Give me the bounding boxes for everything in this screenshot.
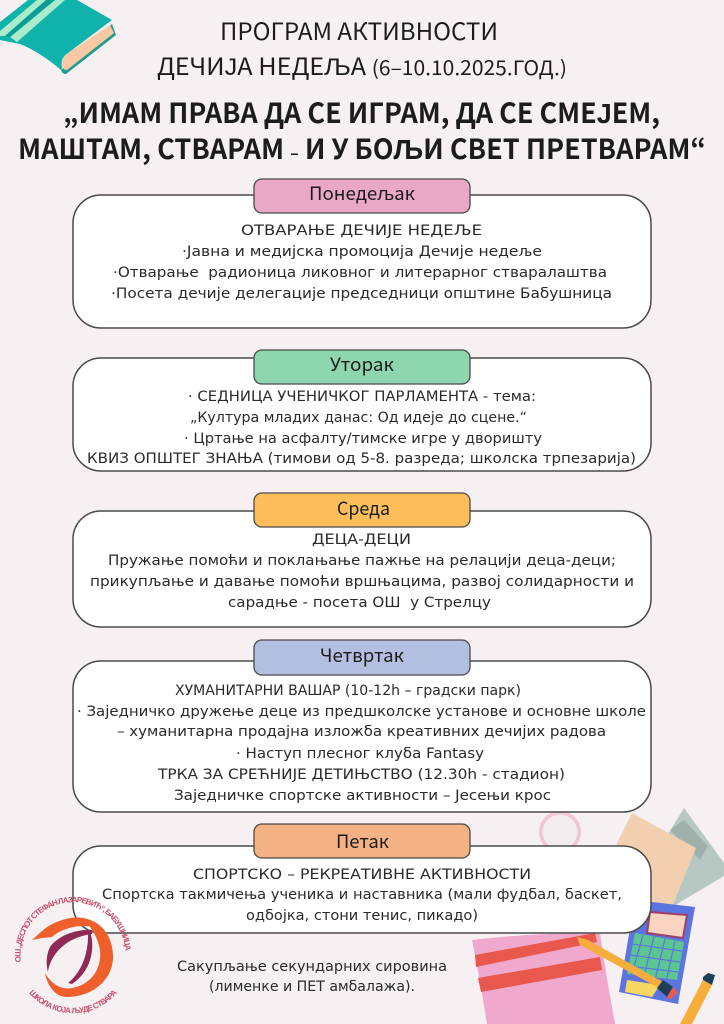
text: Thursday activities: ТРКА ЗА СРЕЋНИЈЕ ДЕТИЊСТВО (12.30h - стадион) bbox=[157, 766, 565, 783]
text: Friday activities: Спортска такмичења ученика и наставника (мали фудбал, баскет, bbox=[102, 886, 622, 903]
text: Wednesday activities: Пружање помоћи и поклањање пажње на релацији деца-деци; bbox=[108, 552, 616, 569]
tab: Tuesday bbox=[254, 350, 470, 384]
title: ПРОГРАМ АКТИВНОСТИ bbox=[220, 12, 498, 47]
decoration: stationery cluster bbox=[472, 808, 724, 1024]
heading: slogan: МАШТАМ, СТВАРАМ – И У БОЉИ СВЕТ ПРЕТВАРАМ“ bbox=[18, 128, 706, 168]
panel: Thursday bbox=[73, 640, 651, 812]
tab: Friday bbox=[254, 824, 470, 858]
note: secondary raw materials bbox=[177, 958, 447, 995]
text: Monday activities: ОТВАРАЊЕ ДЕЧИЈЕ НЕДЕЉЕ bbox=[241, 222, 482, 239]
text: Monday activities: ·Отварање радионица ликовног и литерарног стваралаштва bbox=[113, 264, 607, 281]
decoration: pink notebook bbox=[472, 933, 615, 1024]
logo: school emblem: ОШ „ДЕСПОТ СТЕФАН ЛАЗАРЕВИЋ“, БАБУШНИЦА bbox=[14, 896, 131, 962]
text: Thursday activities: – хуманитарна продајна изложба креативних дечијих радова bbox=[117, 723, 606, 740]
title: ДЕЧИЈА НЕДЕЉА (6–10.10.2025.ГОД.) bbox=[157, 47, 567, 82]
note: secondary raw materials: (лименке и ПЕТ амбалажа). bbox=[209, 978, 415, 995]
text: Wednesday activities: ДЕЦА-ДЕЦИ bbox=[312, 531, 411, 548]
text: Tuesday activities: КВИЗ ОПШТЕГ ЗНАЊА (тимови од 5-8. разреда; школска трпезарија) bbox=[87, 450, 636, 467]
heading: slogan bbox=[18, 92, 706, 168]
text: Monday activities: ·Посета дечије делегације председници општине Бабушница bbox=[111, 285, 612, 302]
text: Monday activities bbox=[111, 222, 612, 302]
tab: Tuesday: Уторак bbox=[330, 351, 394, 377]
note: secondary raw materials: Сакупљање секундарних сировина bbox=[177, 958, 447, 975]
tab: Thursday: Четвртак bbox=[320, 642, 404, 668]
panel: Wednesday bbox=[73, 493, 651, 627]
text: Friday activities: СПОРТСКО – РЕКРЕАТИВНЕ АКТИВНОСТИ bbox=[193, 866, 531, 883]
title bbox=[157, 12, 567, 82]
panel: Tuesday bbox=[73, 350, 651, 471]
tab: Thursday bbox=[254, 640, 470, 675]
text: Wednesday activities: сарадње - посета ОШ у Стрелцу bbox=[228, 594, 491, 611]
text: Thursday activities: Заједничке спортске активности – Јесењи крос bbox=[174, 787, 551, 804]
tab: Wednesday bbox=[254, 493, 470, 527]
text: Friday activities bbox=[102, 866, 622, 924]
text: Thursday activities: ХУМАНИТАРНИ ВАШАР (10-12h – градски парк) bbox=[175, 682, 521, 699]
decoration: second pencil bbox=[680, 973, 715, 1024]
text: Friday activities: одбојка, стони тенис, пикадо) bbox=[246, 907, 478, 924]
tab: Monday bbox=[254, 179, 470, 213]
panel: Monday bbox=[73, 179, 651, 328]
tab: Monday: Понедељак bbox=[309, 180, 415, 206]
decoration: calculator bbox=[619, 900, 695, 1004]
text: Thursday activities bbox=[77, 682, 646, 804]
decoration: yellow pencil bbox=[577, 937, 678, 1000]
icon: teal book bbox=[0, 0, 116, 74]
text: Tuesday activities: · СЕДНИЦА УЧЕНИЧКОГ ПАРЛАМЕНТА - тема: bbox=[188, 388, 536, 405]
heading: slogan: „ИМАМ ПРАВА ДА СЕ ИГРАМ, ДА СЕ СМЕЈЕМ, bbox=[63, 92, 660, 132]
tab: Wednesday: Среда bbox=[337, 495, 390, 521]
text: Wednesday activities bbox=[90, 531, 634, 611]
decoration: round mirror bbox=[539, 811, 581, 853]
text: Thursday activities: · Наступ плесног клуба Fantasy bbox=[236, 745, 484, 762]
logo: school emblem: ШКОЛА КОЈА ЉУДЕ СТВАРА bbox=[29, 990, 118, 1014]
tab: Friday: Петак bbox=[336, 828, 389, 854]
text: Monday activities: ·Јавна и медијска промоција Дечије недеље bbox=[182, 243, 542, 260]
text: Thursday activities: · Заједничко дружење деце из предшколске установе и основне школе bbox=[77, 703, 646, 720]
logo: school emblem bbox=[14, 896, 131, 1014]
panel: Friday bbox=[73, 824, 651, 933]
text: Tuesday activities bbox=[87, 388, 636, 467]
text: Tuesday activities: · Цртање на асфалту/тимске игре у дворишту bbox=[184, 430, 542, 447]
text: Tuesday activities: „Култура младих данас: Од идеје до сцене.“ bbox=[190, 409, 527, 426]
text: Wednesday activities: прикупљање и давање помоћи вршњацима, развој солидарности и bbox=[90, 573, 634, 590]
